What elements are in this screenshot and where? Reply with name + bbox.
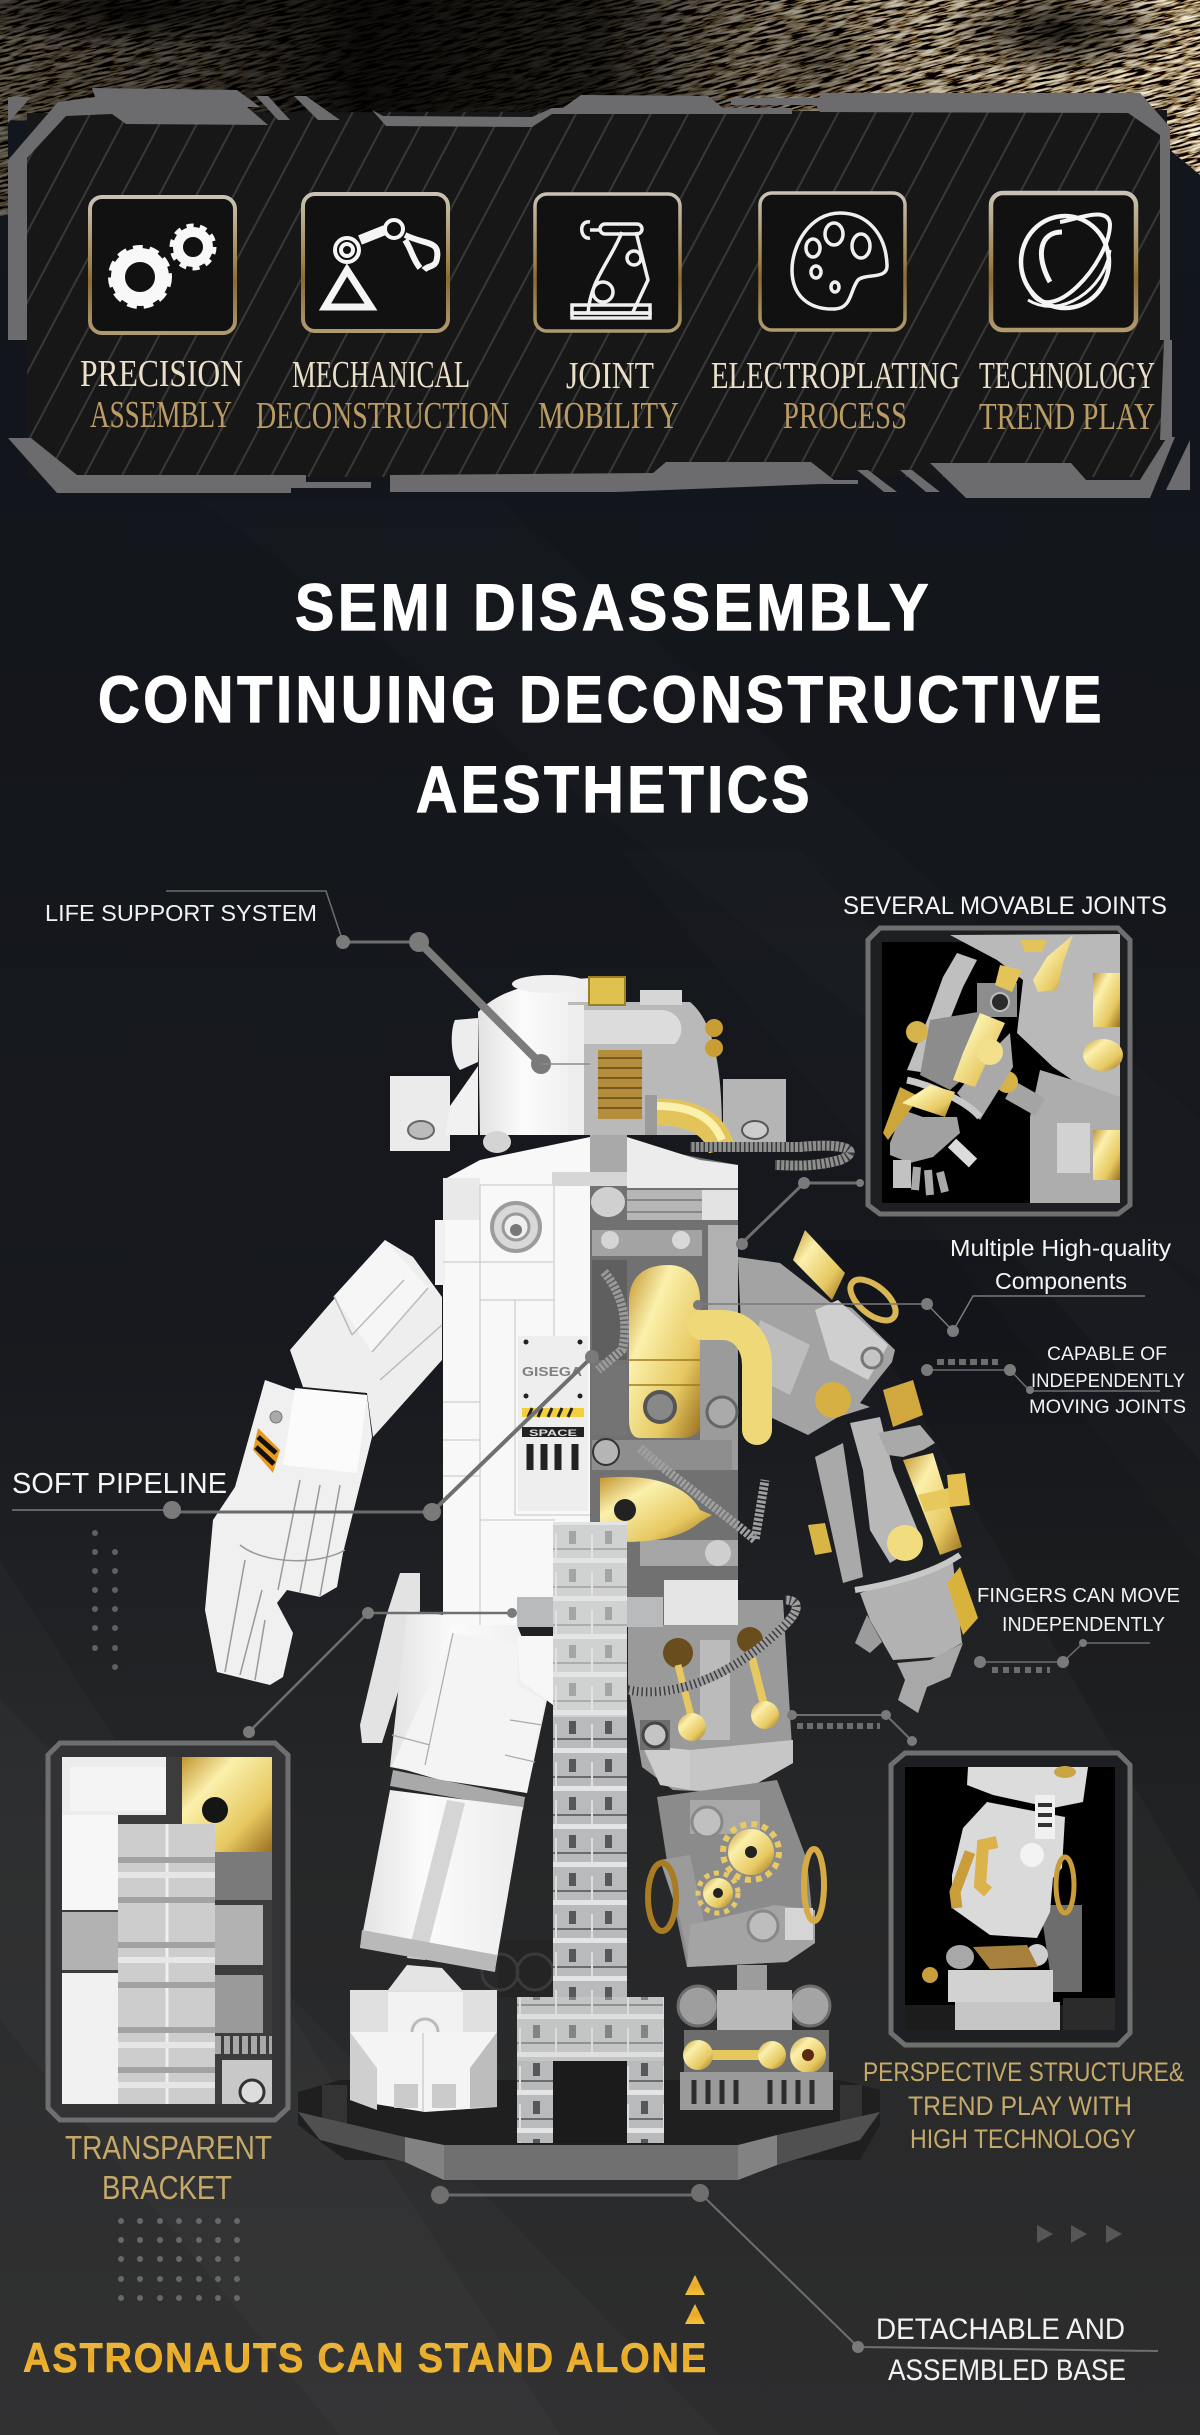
label: precision assembly: PRECISION — [80, 353, 243, 395]
callout: detachable base: DETACHABLE AND — [876, 2313, 1125, 2346]
callout: life support system — [45, 891, 590, 1074]
panel: movable joints photo — [868, 928, 1130, 1214]
callout: capable of independently moving joints: INDEPENDENTLY — [1031, 1371, 1185, 1392]
label: joint mobility: JOINT — [566, 355, 654, 397]
panel: transparent bracket photo — [48, 1743, 288, 2120]
dot grid: left — [92, 1530, 118, 1670]
callout: multiple high-quality components: Multiple High-quality — [950, 1235, 1172, 1261]
label: precision assembly: ASSEMBLY — [90, 394, 232, 436]
dot grid: bottom — [118, 2218, 240, 2301]
title: AESTHETICS — [416, 752, 813, 826]
callout: capable of independently moving joints: MOVING JOINTS — [1029, 1397, 1186, 1418]
callout: several movable joints — [736, 892, 1167, 1250]
callout: capable of independently moving joints: CAPABLE OF — [1047, 1344, 1167, 1365]
astronaut: left torso: SPACE — [529, 1428, 577, 1439]
astronaut: right arm — [738, 1230, 978, 1713]
astronaut: right foot — [678, 1965, 833, 2110]
feature panel — [8, 88, 1190, 498]
callout: transparent bracket — [65, 1607, 517, 2206]
moon surface photo — [0, 0, 1200, 216]
callout: perspective structure: HIGH TECHNOLOGY — [910, 2124, 1136, 2154]
label: mechanical deconstruction: DECONSTRUCTION — [256, 395, 509, 437]
shoulder hose — [690, 1146, 850, 1166]
callout: detachable base — [431, 2184, 1158, 2387]
label: electroplating process: ELECTROPLATING — [711, 355, 960, 397]
astronaut: left leg — [350, 1573, 553, 2112]
icon: planet — [991, 193, 1136, 330]
icon: paint palette — [760, 193, 905, 330]
callout: life support system: LIFE SUPPORT SYSTEM — [45, 900, 317, 926]
astronaut: left torso: GISEGA — [522, 1364, 583, 1379]
callout: transparent bracket: TRANSPARENT — [65, 2129, 272, 2166]
panel frame — [8, 88, 1190, 498]
abdomen hose — [628, 1600, 796, 1692]
label: mechanical deconstruction: MECHANICAL — [292, 354, 470, 396]
label: electroplating process: PROCESS — [783, 395, 907, 437]
callout: fingers can move independently: INDEPENDENTLY — [1002, 1614, 1165, 1636]
transparent bracket column — [517, 1522, 664, 2143]
astronaut: gold tank and pipe — [600, 1265, 757, 1542]
astronaut: display base — [298, 1940, 880, 2180]
panel: leg close-up photo — [891, 1753, 1130, 2045]
label: joint mobility — [538, 355, 679, 437]
callout: soft pipeline — [12, 1350, 599, 1521]
callout: transparent bracket: BRACKET — [102, 2169, 232, 2206]
panel background — [27, 110, 1167, 477]
callout: soft pipeline: SOFT PIPELINE — [12, 1468, 227, 1500]
callout: capable of independently moving joints — [921, 1344, 1186, 1418]
astronaut: mechanical torso — [552, 1135, 765, 1625]
label: precision assembly — [80, 353, 243, 436]
callout: fingers can move independently: FINGERS CAN MOVE — [977, 1585, 1180, 1607]
astronaut: left torso — [435, 1137, 590, 1625]
astronaut: white left arm — [205, 1240, 442, 1685]
callout: detachable base: ASSEMBLED BASE — [888, 2354, 1126, 2387]
callout: perspective structure — [787, 1710, 1184, 2154]
title — [98, 570, 1105, 826]
title: SEMI DISASSEMBLY — [295, 570, 932, 644]
astronaut: head — [390, 975, 786, 1153]
label: mechanical deconstruction — [256, 354, 509, 437]
callout: several movable joints: SEVERAL MOVABLE JOINTS — [843, 892, 1167, 920]
icon: gold up arrows — [685, 2275, 705, 2324]
callout: fingers can move independently — [974, 1585, 1180, 1670]
icon: gears — [90, 197, 235, 333]
label: electroplating process — [711, 355, 960, 437]
astronaut: right leg mechanical — [628, 1600, 824, 1967]
callout: perspective structure: TREND PLAY WITH — [908, 2091, 1132, 2121]
icon: mechanical arm — [303, 194, 448, 331]
callout: multiple high-quality components — [693, 1235, 1172, 1337]
icon: robot arm — [535, 194, 680, 331]
callout: multiple high-quality components: Components — [995, 1268, 1127, 1294]
label: technology trend play — [979, 355, 1155, 438]
diagonal light streaks — [0, 500, 1200, 2435]
slogan: ASTRONAUTS CAN STAND ALONE — [23, 2334, 708, 2381]
icon: right-pointing arrows — [1037, 2225, 1122, 2243]
label: joint mobility: MOBILITY — [538, 395, 679, 437]
